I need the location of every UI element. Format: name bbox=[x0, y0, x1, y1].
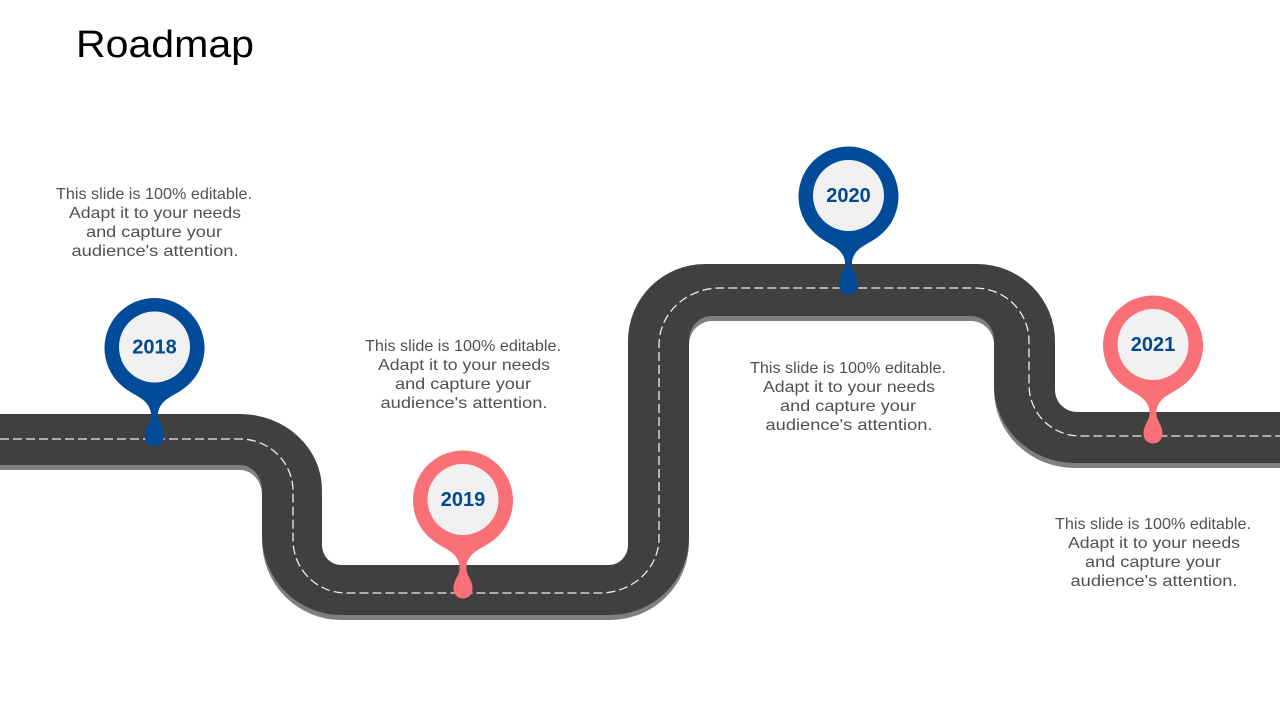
text block: 2020: audience's attention. bbox=[766, 417, 932, 434]
text block: 2018 bbox=[56, 186, 252, 260]
pin: 2020: 2020 bbox=[826, 185, 871, 207]
text block: 2019 bbox=[365, 338, 561, 412]
pin: 2021 bbox=[1103, 296, 1203, 444]
text block: 2020: This slide is 100% editable. bbox=[750, 360, 946, 377]
text block: 2019: audience's attention. bbox=[380, 395, 548, 412]
text block: 2018: audience's attention. bbox=[72, 243, 238, 260]
text block: 2019: This slide is 100% editable. bbox=[365, 338, 561, 355]
text block: 2018: Adapt it to your needs bbox=[69, 205, 241, 222]
text block: 2018: This slide is 100% editable. bbox=[56, 186, 252, 203]
text block: 2021: and capture your bbox=[1085, 554, 1222, 571]
text block: 2019: and capture your bbox=[395, 376, 532, 393]
pin: 2019 bbox=[413, 450, 513, 598]
road surface bbox=[0, 264, 1280, 615]
text block: 2021: Adapt it to your needs bbox=[1068, 535, 1240, 552]
text block: 2019: Adapt it to your needs bbox=[378, 357, 550, 374]
text block: 2021: audience's attention. bbox=[1070, 573, 1238, 590]
text block: 2020: Adapt it to your needs bbox=[763, 379, 935, 396]
pin: 2018: 2018 bbox=[132, 336, 177, 358]
road centre dashed line bbox=[0, 288, 1280, 593]
pin: 2018 bbox=[104, 298, 204, 446]
pin: 2021: 2021 bbox=[1131, 334, 1175, 356]
text block: 2018: and capture your bbox=[86, 224, 223, 241]
winding road bbox=[0, 264, 1280, 620]
text block: 2020 bbox=[750, 360, 946, 434]
pin: 2019: 2019 bbox=[441, 489, 485, 511]
road shadow bbox=[0, 269, 1280, 620]
text block: 2020: and capture your bbox=[780, 398, 917, 415]
title: Roadmap bbox=[76, 24, 254, 66]
pin: 2020 bbox=[798, 146, 898, 294]
text block: 2021: This slide is 100% editable. bbox=[1055, 516, 1251, 533]
text block: 2021 bbox=[1055, 516, 1251, 590]
